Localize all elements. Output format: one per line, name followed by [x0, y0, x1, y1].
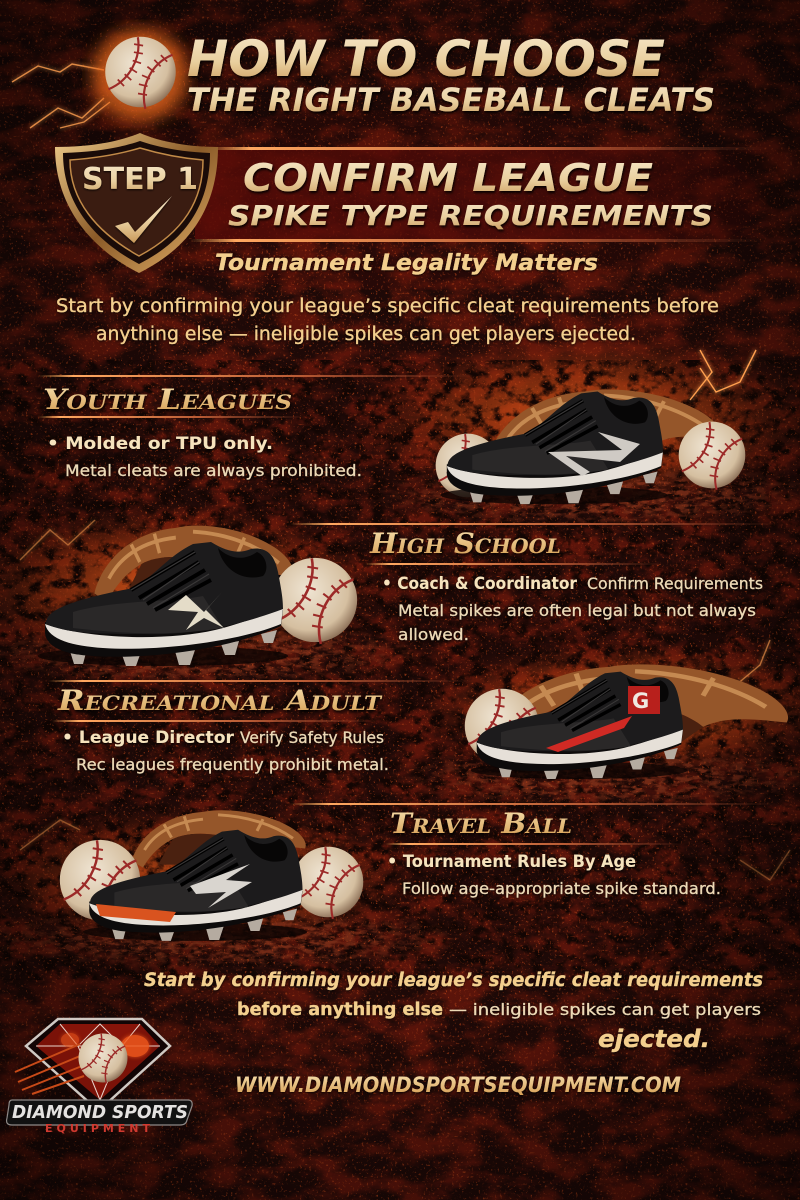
- heading: Travel Ball: [390, 807, 572, 840]
- name plate: [7, 1100, 192, 1125]
- diamond emblem: [26, 1019, 170, 1105]
- icon: flaming baseball: [92, 29, 188, 121]
- illustration: recreational cleat: G: [632, 689, 649, 713]
- panel: high school text: Confirm Requirements: [587, 574, 763, 593]
- detail: Rec leagues frequently prohibit metal.: [76, 755, 389, 774]
- heading: High School: [369, 527, 561, 560]
- panel: recreational adult text: [48, 680, 478, 774]
- illustration: youth cleat: [436, 390, 745, 504]
- brand name: DIAMOND SPORTS: [12, 1102, 188, 1123]
- step banner: [190, 147, 785, 242]
- title line 2: THE RIGHT BASEBALL CLEATS: [187, 81, 715, 119]
- panel: youth leagues text: [38, 375, 478, 480]
- emblem baseball: [78, 1033, 128, 1084]
- detail: Metal spikes are often legal but not always: [398, 601, 756, 620]
- shield label: STEP 1: [82, 162, 198, 197]
- step heading line 1: CONFIRM LEAGUE: [243, 156, 653, 200]
- panel: high school text: [290, 523, 780, 644]
- bullet: • Tournament Rules By Age: [387, 852, 636, 872]
- brand subline: EQUIPMENT: [45, 1122, 150, 1135]
- panel: recreational adult text: Verify Safety Rules: [240, 728, 384, 747]
- bullet: • Molded or TPU only.: [47, 434, 273, 454]
- closing statement: Start by confirming your league’s specific cleat requirements: [144, 970, 763, 991]
- illustration: recreational cleat: [465, 664, 788, 779]
- heading: Youth Leagues: [43, 383, 292, 416]
- lightning and sparks: [12, 64, 790, 880]
- banner band: [195, 150, 785, 239]
- bullet: • League Director: [62, 728, 235, 748]
- detail: Follow age-appropriate spike standard.: [402, 879, 721, 898]
- illustration: travel ball cleat: [60, 810, 363, 941]
- closing statement: ejected.: [598, 1025, 710, 1053]
- banner rule top: [205, 147, 770, 150]
- banner rule bottom: [190, 239, 765, 242]
- step heading line 2: SPIKE TYPE REQUIREMENTS: [228, 199, 713, 232]
- title line 1: HOW TO CHOOSE: [187, 30, 665, 88]
- icon: check mark: [115, 196, 172, 243]
- panel: travel ball text: [290, 803, 780, 898]
- step 1 shield badge: [55, 133, 218, 273]
- intro paragraph: anything else — ineligible spikes can get players ejected.: [96, 324, 636, 345]
- closing statement: before anything else: [237, 999, 443, 1020]
- website url: WWW.DIAMONDSPORTSEQUIPMENT.COM: [235, 1073, 681, 1097]
- subheading: Tournament Legality Matters: [215, 251, 598, 276]
- detail: Metal cleats are always prohibited.: [65, 461, 362, 480]
- panel: high school text: allowed.: [398, 625, 469, 644]
- closing statement: — ineligible spikes can get players: [449, 1000, 761, 1019]
- heading: Recreational Adult: [57, 684, 383, 717]
- closing statement: [144, 970, 763, 1053]
- title: [92, 29, 715, 121]
- illustration: high school cleat: [38, 526, 357, 666]
- intro paragraph: [56, 296, 719, 345]
- intro paragraph: Start by confirming your league’s specific cleat requirements before: [56, 296, 719, 317]
- logo: diamond sports equipment: [7, 1019, 192, 1135]
- bullet: • Coach & Coordinator: [382, 574, 578, 594]
